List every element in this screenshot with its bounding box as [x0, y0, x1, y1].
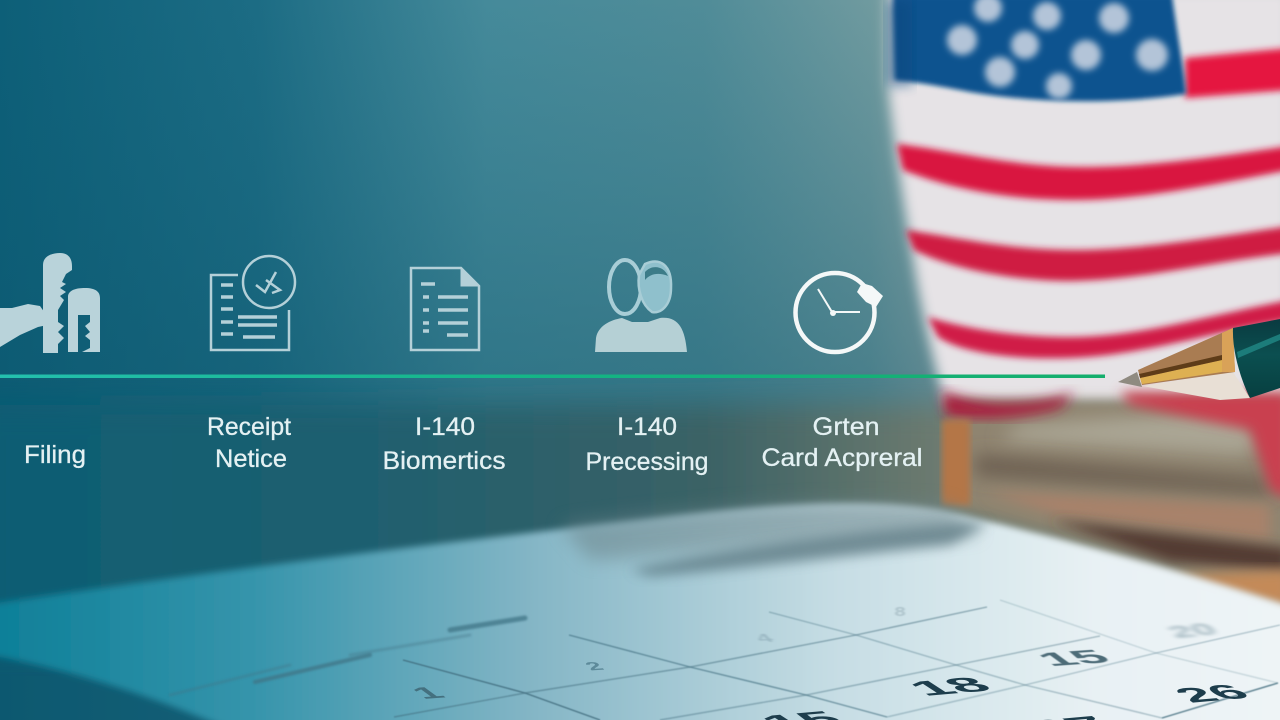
icon: document	[411, 268, 479, 350]
label: processing	[586, 413, 708, 476]
step 1: filing	[0, 253, 100, 469]
calendar numbers: 8	[894, 604, 906, 619]
icon: buildings and hand	[0, 253, 100, 353]
label: processing: Precessing	[586, 448, 708, 476]
icon: document with check seal	[211, 256, 295, 350]
calendar numbers: 15	[1028, 645, 1119, 670]
label: green card approval: Card Acpreral	[762, 444, 922, 472]
calendar header marks	[170, 618, 525, 695]
step 5: green card approval	[762, 273, 922, 472]
label: green card approval: Grten	[812, 413, 880, 441]
calendar numbers: 18	[898, 673, 1001, 700]
step 4: processing	[586, 260, 708, 476]
calendar	[0, 502, 1280, 720]
label: green card approval	[762, 413, 922, 472]
pen gold cone	[1138, 328, 1235, 385]
lower dark table band	[0, 405, 1280, 645]
step 2: receipt notice	[207, 256, 295, 473]
label: receipt notice	[207, 413, 291, 473]
label: filing: Filing	[24, 441, 86, 469]
calendar numbers: 26	[1164, 680, 1259, 707]
label: receipt notice: Receipt	[207, 413, 291, 441]
timeline line	[0, 374, 1105, 378]
pen tip	[1118, 372, 1142, 387]
calendar numbers	[405, 604, 1259, 720]
calendar numbers: 20	[1161, 619, 1223, 642]
icon: two people	[595, 260, 687, 352]
pen body	[1233, 319, 1280, 398]
pen	[1118, 319, 1280, 400]
step 3: biomertics	[382, 268, 506, 475]
label: biomertics	[382, 413, 506, 475]
label: biomertics: Biomertics	[382, 447, 506, 475]
label: receipt notice: Netice	[215, 445, 287, 473]
calendar numbers: 2	[581, 660, 608, 673]
icon: clock	[796, 273, 883, 352]
table scene below flag	[942, 390, 1280, 610]
label: biomertics: I-140	[415, 413, 475, 441]
pen lower white cone	[1142, 372, 1250, 400]
flag	[888, 0, 1280, 405]
calendar grid	[394, 600, 1280, 720]
label: processing: I-140	[617, 413, 677, 441]
flag stars	[947, 0, 1168, 99]
calendar numbers: 4	[751, 632, 778, 645]
calendar numbers: 1	[405, 684, 451, 702]
